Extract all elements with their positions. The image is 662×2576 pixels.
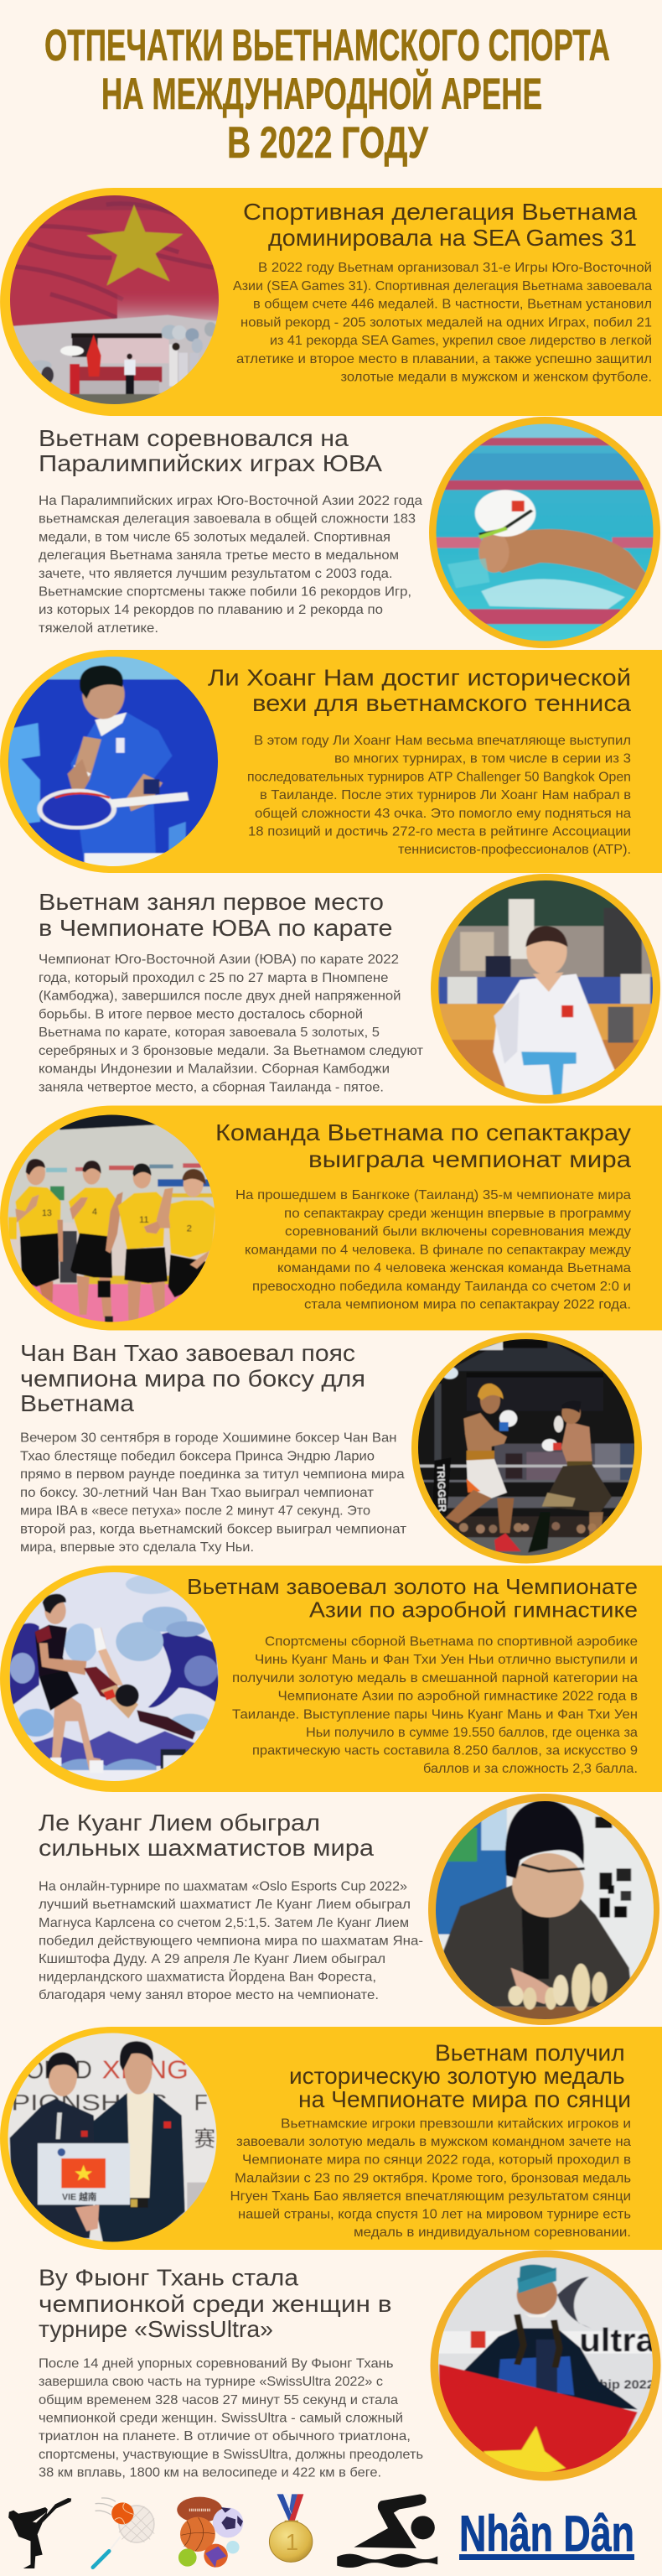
photo: team: 2	[187, 1224, 192, 1234]
body text: практическую часть составила 8.250 баллов, за искусство 9	[252, 1744, 638, 1758]
panel: karate	[39, 874, 660, 1104]
body text	[230, 2116, 631, 2240]
body text	[39, 2356, 423, 2480]
photo: swimmer	[431, 420, 659, 645]
body text: На прошедшем в Бангкоке (Таиланд) 35-м чемпионате мира	[235, 1188, 631, 1202]
body text	[247, 734, 631, 857]
body text: Спортсмены сборной Вьетнама по спортивной аэробике	[265, 1635, 638, 1649]
body text: Чемпионат Юго-Восточной Азии (ЮВА) по карате 2022	[39, 953, 399, 967]
heading: сильных шахматистов мира	[39, 1835, 374, 1861]
icon: gold medal: 1	[286, 2529, 298, 2555]
body text: из которых 14 рекордов по плаванию и 2 рекорда по	[39, 603, 383, 617]
body text: борьбы. В итоге первое место досталось сборной	[39, 1007, 363, 1021]
photo: xiangqi players: 赛	[194, 2127, 215, 2151]
body text: В этом году Ли Хоанг Нам весьма впечатляюще выступил	[254, 734, 631, 748]
photo: team	[8, 1115, 215, 1322]
body text: из 41 рекорда SEA Games, укрепил свое лидерство в легкой	[270, 334, 652, 348]
body text: нашей страны, когда спустя 10 лет на мировом турнире есть	[238, 2207, 631, 2222]
photo ring	[428, 1794, 659, 2025]
body text: общим временем 328 часов 27 минут 55 секунд и стала	[39, 2393, 398, 2407]
body text: общей сложности 43 очка. Это помогло ему подняться на	[255, 807, 631, 821]
body text: лучший вьетнамский шахматист Ле Куанг Лием обыграл	[39, 1898, 411, 1912]
icon: sports balls	[177, 2497, 243, 2568]
heading: на Чемпионате мира по сянци	[298, 2086, 631, 2112]
heading	[243, 199, 637, 251]
icon: tennis racket and ball	[93, 2498, 154, 2568]
heading: чемпиона мира по боксу для	[20, 1366, 365, 1392]
photo: tennis player	[0, 654, 224, 870]
body text: На онлайн-турнире по шахматам «Oslo Esports Cup 2022»	[39, 1880, 407, 1893]
body text: заняла четвертое место, а сборная Таиланда - пятое.	[39, 1080, 384, 1095]
body text: по сепактакрау среди женщин впервые в программу	[284, 1207, 631, 1221]
body text: Магнуса Карлсена со счетом 2,5:1,5. Затем Ле Куанг Лием	[39, 1916, 409, 1930]
heading	[39, 1810, 374, 1861]
body text: триатлон на планете. В отличие от обычного триатлона,	[39, 2429, 411, 2444]
body text: тяжелой атлетике.	[39, 621, 158, 636]
body text: мира IBA в «весе петуха» после 2 минут 47 секунд. Это	[20, 1504, 370, 1518]
body text: завершила свою часть на турнире «SwissUltra 2022» с	[39, 2375, 383, 2389]
body text: После 14 дней упорных соревнований Ву Фыонг Тхань	[39, 2356, 394, 2371]
heading	[39, 889, 393, 941]
body text: года, который проходил с 25 по 27 марта в Пномпене	[39, 971, 389, 985]
photo ring	[429, 417, 660, 648]
body text: получили золотую медаль в смешанной парной категории на	[232, 1671, 638, 1685]
heading: доминировала на SEA Games 31	[268, 225, 637, 251]
heading: Вьетнам занял первое место	[39, 889, 384, 915]
body text: На Паралимпийских играх Юго-Восточной Азии 2022 года	[39, 494, 422, 508]
body text: стала чемпионом мира по сепактакрау 2022 года.	[304, 1298, 631, 1312]
icon: gold medal	[269, 2494, 313, 2562]
title: В 2022 ГОДУ	[227, 118, 429, 168]
heading: Ли Хоанг Нам достиг исторической	[208, 664, 631, 691]
photo: xiangqi players: XIANG	[102, 2056, 189, 2085]
body text: Малайзии с 23 по 29 октября. Кроме того, бронзовая медаль	[235, 2171, 631, 2185]
body text: команды Индонезии и Малайзии. Сборная Камбоджи	[39, 1062, 390, 1077]
body text: в общем счете 446 медалей. В частности, Вьетнам установил	[253, 298, 652, 312]
body text: Таиланде. Выступление пары Чинь Куанг Мань и Фан Тхи Уен	[232, 1707, 638, 1722]
panel: SwissUltra	[39, 2251, 660, 2480]
body text: золотые медали в мужском и женском футболе.	[340, 370, 652, 384]
body text: новый рекорд - 205 золотых медалей на одних Играх, побил 21	[240, 315, 652, 330]
body text: Азии (SEA Games 31). Спортивная делегация Вьетнама завоевала	[233, 279, 652, 293]
body text: В 2022 году Вьетнам организовал 31-е Игры Юго-Восточной	[258, 261, 652, 275]
body text	[39, 1880, 423, 2002]
body text: по боксу. 30-летний Чан Ван Тхао выиграл чемпионат	[20, 1486, 375, 1500]
body text: мира, впервые это сделала Тху Ньи.	[20, 1540, 254, 1555]
body text: баллов и за сложность 2,3 балла.	[423, 1762, 638, 1776]
panel: xiangqi	[0, 2026, 662, 2252]
body text: Чинь Куанг Мань и Фан Тхи Уен Ньи отлично выступили и	[255, 1653, 638, 1667]
body text	[233, 261, 652, 384]
photo: team: 13	[42, 1208, 52, 1218]
heading: Ле Куанг Лием обыграл	[39, 1810, 320, 1836]
photo: xiangqi players: VIE 越南	[62, 2191, 97, 2202]
panel: SEA Games 31	[0, 188, 662, 416]
heading: историческую золотую медаль	[289, 2063, 625, 2089]
player 1	[39, 1281, 53, 1302]
panel: Paralympics	[39, 417, 660, 648]
body text: спортсмены, участвующие в SwissUltra, должны преодолеть	[39, 2448, 423, 2462]
photo: xiangqi players: F	[194, 2090, 208, 2116]
woman	[95, 1628, 123, 1686]
body text: Чемпионате Азии по аэробной гимнастике 2022 года в	[278, 1690, 638, 1704]
body text: вьетнамская делегация завоевала в общей сложности 183	[39, 512, 416, 527]
body text	[39, 494, 422, 636]
body text: Ньи получило в сумме 19.550 баллов, где оценка за	[306, 1726, 638, 1740]
photo: boxing match: TRIGGER	[435, 1464, 448, 1512]
body text: прямо в первом раунде поединка за титул чемпиона мира	[20, 1467, 405, 1482]
body text	[235, 1188, 631, 1312]
body text: зачете, что является лучшим результатом с 2003 года.	[39, 567, 392, 581]
body text: 38 км вплавь, 1800 км на велосипеде и 422 км в беге.	[39, 2465, 381, 2480]
body text: теннисистов-профессионалов (ATP).	[398, 843, 631, 857]
heading: вехи для вьетнамского тенниса	[252, 690, 631, 716]
body text: победил действующего чемпиона мира по шахматам Яна-	[39, 1934, 423, 1948]
heading: чемпионкой среди женщин в	[39, 2291, 391, 2317]
body text: серебряных и 3 бронзовые медали. За Вьетнамом следуют	[39, 1044, 424, 1058]
body text	[20, 1431, 407, 1555]
player 2	[77, 1275, 90, 1315]
photo: xiangqi players: PIONSHIPS	[11, 2090, 168, 2116]
body text: делегация Вьетнама заняла третье место в медальном	[39, 548, 399, 563]
heading: Чан Ван Тхао завоевал пояс	[20, 1340, 355, 1366]
photo ring	[431, 2251, 660, 2480]
icons row	[8, 2494, 634, 2568]
photo ring	[431, 874, 660, 1104]
heading	[20, 1340, 365, 1416]
body text: Нгуен Тхань Бао является впечатляющим результатом сянци	[230, 2189, 631, 2204]
player 3	[128, 1281, 141, 1321]
heading	[39, 2265, 391, 2342]
title	[44, 21, 610, 168]
photo: triathlete with flag	[431, 2253, 659, 2476]
body text: 18 позиций и достичь 272-го места в рейтинге Ассоциации	[248, 824, 631, 839]
body text: во многих турнирах, в том числе в серии из 3	[334, 752, 631, 766]
body text: Вьетнама по карате, которая завоевала 5 золотых, 5	[39, 1026, 380, 1040]
photo: aerobics pair	[10, 1572, 218, 1781]
body text: Вьетнамские игроки превзошли китайских игроков и	[281, 2116, 631, 2132]
body text: чемпионкой среди женщин. SwissUltra - самый сложный	[39, 2412, 403, 2425]
body text: благодаря чему занял второе место на чемпионате.	[39, 1988, 379, 2002]
body text	[232, 1635, 638, 1776]
panel: aerobics	[0, 1565, 662, 1795]
body text: Вечером 30 сентября в городе Хошимине боксер Чан Ван	[20, 1431, 396, 1446]
photo: team: 4	[92, 1208, 97, 1218]
panel: tennis	[0, 650, 662, 873]
body text: соревнований были включены соревнования между	[285, 1225, 631, 1239]
photo: xiangqi players: ORLD	[25, 2056, 92, 2085]
photo: xiangqi players	[8, 2033, 216, 2242]
heading: выиграла чемпионат мира	[308, 1146, 631, 1172]
heading: Вьетнам получил	[435, 2040, 625, 2066]
man	[52, 1696, 102, 1772]
body text: командами по 4 человека. В финале по сепактакрау между	[245, 1243, 631, 1257]
body text: превосходно победила команду Таиланда со счетом 2:0 и	[252, 1280, 631, 1294]
panel: sepak takraw	[0, 1105, 662, 1332]
heading: Азии по аэробной гимнастике	[309, 1597, 638, 1623]
heading: Вьетнама	[20, 1390, 134, 1416]
body text: атлетике и второе место в плавании, а также успешно защитил	[236, 352, 652, 366]
heading: Спортивная делегация Вьетнама	[243, 199, 637, 225]
body text: Вьетнамские спортсмены также побили 16 рекордов Игр,	[39, 585, 411, 599]
player 4	[168, 1200, 215, 1258]
body text: завоевали золотую медаль в мужском командном зачете на	[236, 2135, 631, 2149]
icon: karate	[8, 2498, 71, 2568]
heading	[187, 1574, 638, 1623]
panel: boxing	[20, 1333, 645, 1564]
heading: Ву Фыонг Тхань стала	[39, 2265, 298, 2291]
body text: Чемпионате мира по сянци 2022 года, который проходил в	[242, 2153, 631, 2168]
heading: Вьетнам соревновался на	[39, 425, 349, 451]
heading: Паралимпийских играх ЮВА	[39, 450, 382, 476]
body text: медаль в индивидуальном соревновании.	[354, 2225, 631, 2240]
heading	[208, 664, 631, 716]
photo: flag and delegation	[10, 195, 219, 404]
body text: медали, в том числе 65 золотых медалей. Спортивная	[39, 530, 390, 544]
body text: второй раз, когда вьетнамский боксер выиграл чемпионат	[20, 1522, 407, 1536]
photo: team: 11	[139, 1215, 149, 1225]
heading: Вьетнам завоевал золото на Чемпионате	[187, 1574, 638, 1599]
body text: в Таиланде. После этих турниров Ли Хоанг Нам набрал в	[260, 788, 631, 802]
heading	[289, 2040, 631, 2112]
photo: karate athlete	[438, 880, 653, 1095]
heading: Команда Вьетнама по сепактакрау	[215, 1119, 631, 1145]
icon: swimmer	[337, 2494, 437, 2568]
body text: (Камбоджа), завершился после двух дней напряженной	[39, 989, 401, 1003]
body text: Тхао блестяще победил боксера Принса Эндрю Ларио	[20, 1449, 375, 1463]
photo ring	[411, 1333, 642, 1563]
body text: последовательных турниров ATP Challenger 50 Bangkok Open	[247, 770, 631, 784]
body text	[39, 953, 424, 1095]
heading: турнире «SwissUltra»	[39, 2316, 273, 2342]
body text: нидерландского шахматиста Йордена Ван Фореста,	[39, 1969, 376, 1985]
body text: Кшиштофа Дуду. А 29 апреля Ле Куанг Лием обыграл	[39, 1952, 385, 1966]
body text: командами по 4 человека женская команда Вьетнама	[277, 1261, 631, 1275]
photo: chess player	[436, 1801, 654, 2019]
heading	[39, 425, 382, 476]
heading	[215, 1119, 631, 1172]
heading: в Чемпионате ЮВА по карате	[39, 915, 393, 941]
photo: boxing match	[418, 1339, 634, 1555]
panel: chess	[39, 1794, 659, 2027]
